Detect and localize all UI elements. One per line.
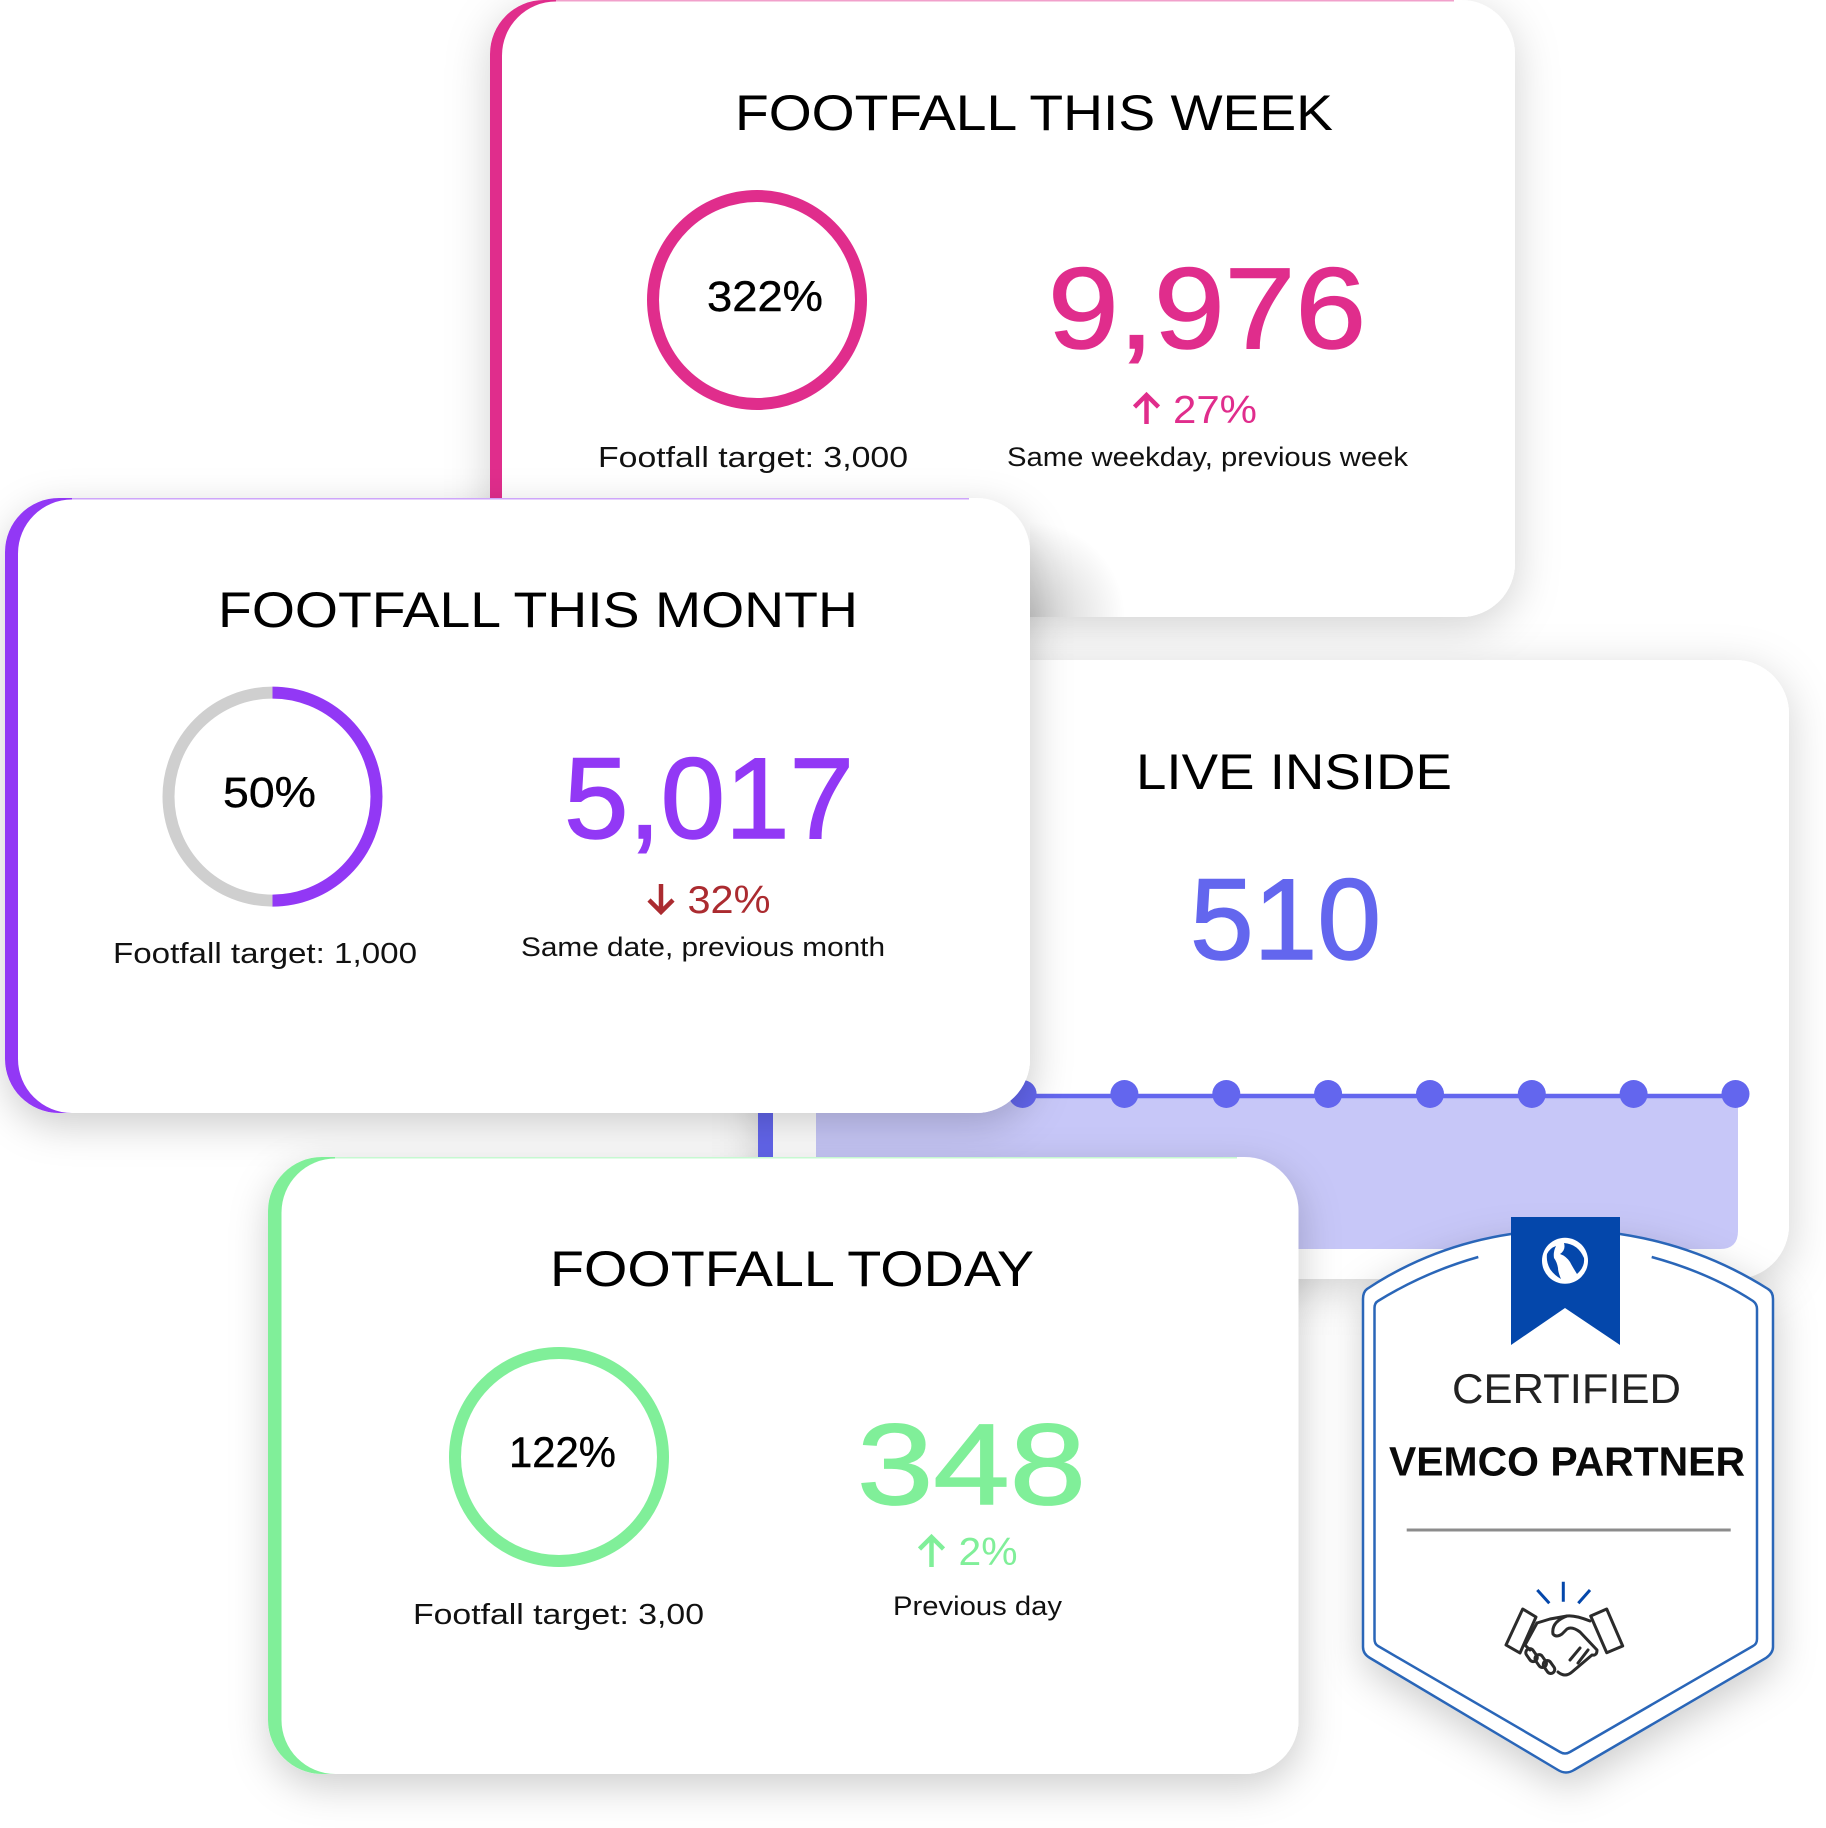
today ring percentage: 122% [509,1429,616,1477]
ribbon [1511,1217,1620,1345]
week comparison label: Same weekday, previous week [1007,442,1409,472]
icon: handshake [1506,1609,1623,1675]
live heading: LIVE INSIDE [1136,744,1452,800]
week footfall number: 9,976 [1048,245,1366,373]
month heading: FOOTFALL THIS MONTH [218,582,858,638]
icon: week up arrow [1134,395,1158,424]
month card background [5,498,1030,1113]
week card background [490,0,1515,617]
week ring percentage: 322% [707,273,823,321]
week heading: FOOTFALL THIS WEEK [735,85,1333,141]
month comparison label: Same date, previous month [521,932,885,962]
panel: footfall today [268,1157,1298,1774]
month footfall number: 5,017 [564,735,854,863]
week change percentage: 27% [1173,389,1257,432]
panel: live inside [758,660,1789,1279]
badge inner outline [1374,1257,1757,1754]
today heading: FOOTFALL TODAY [550,1241,1034,1297]
badge shield [1363,1234,1773,1772]
today card background [268,1157,1298,1774]
week progress ring [653,196,861,404]
icon: globe [1542,1238,1588,1284]
live card background [758,660,1789,1279]
line chart [816,1080,1750,1249]
live number: 510 [1190,856,1381,984]
month corner shadow on week card [1030,522,1125,617]
today comparison label: Previous day [893,1591,1063,1621]
month ring percentage: 50% [223,769,316,817]
area fill [816,1097,1738,1249]
icon: today up arrow [920,1537,944,1567]
certified label: CERTIFIED [1452,1365,1681,1412]
today progress ring [455,1353,663,1561]
trend line [1022,1094,1734,1098]
partner label: VEMCO PARTNER [1389,1438,1745,1484]
panel: footfall this week [490,0,1515,617]
today footfall number: 348 [857,1401,1086,1529]
week target label: Footfall target: 3,000 [598,442,908,474]
badge divider [1407,1528,1731,1532]
month progress ring [168,693,376,901]
data points [1009,1080,1750,1108]
today change percentage: 2% [958,1531,1018,1574]
icon: handshake rays [1537,1582,1590,1603]
month target label: Footfall target: 1,000 [113,938,417,970]
icon: month down arrow [649,884,673,912]
panel: footfall this month [5,498,1125,1113]
month change percentage: 32% [688,879,770,922]
badge: certified vemco partner [1363,1217,1773,1772]
today target label: Footfall target: 3,00 [413,1599,704,1631]
